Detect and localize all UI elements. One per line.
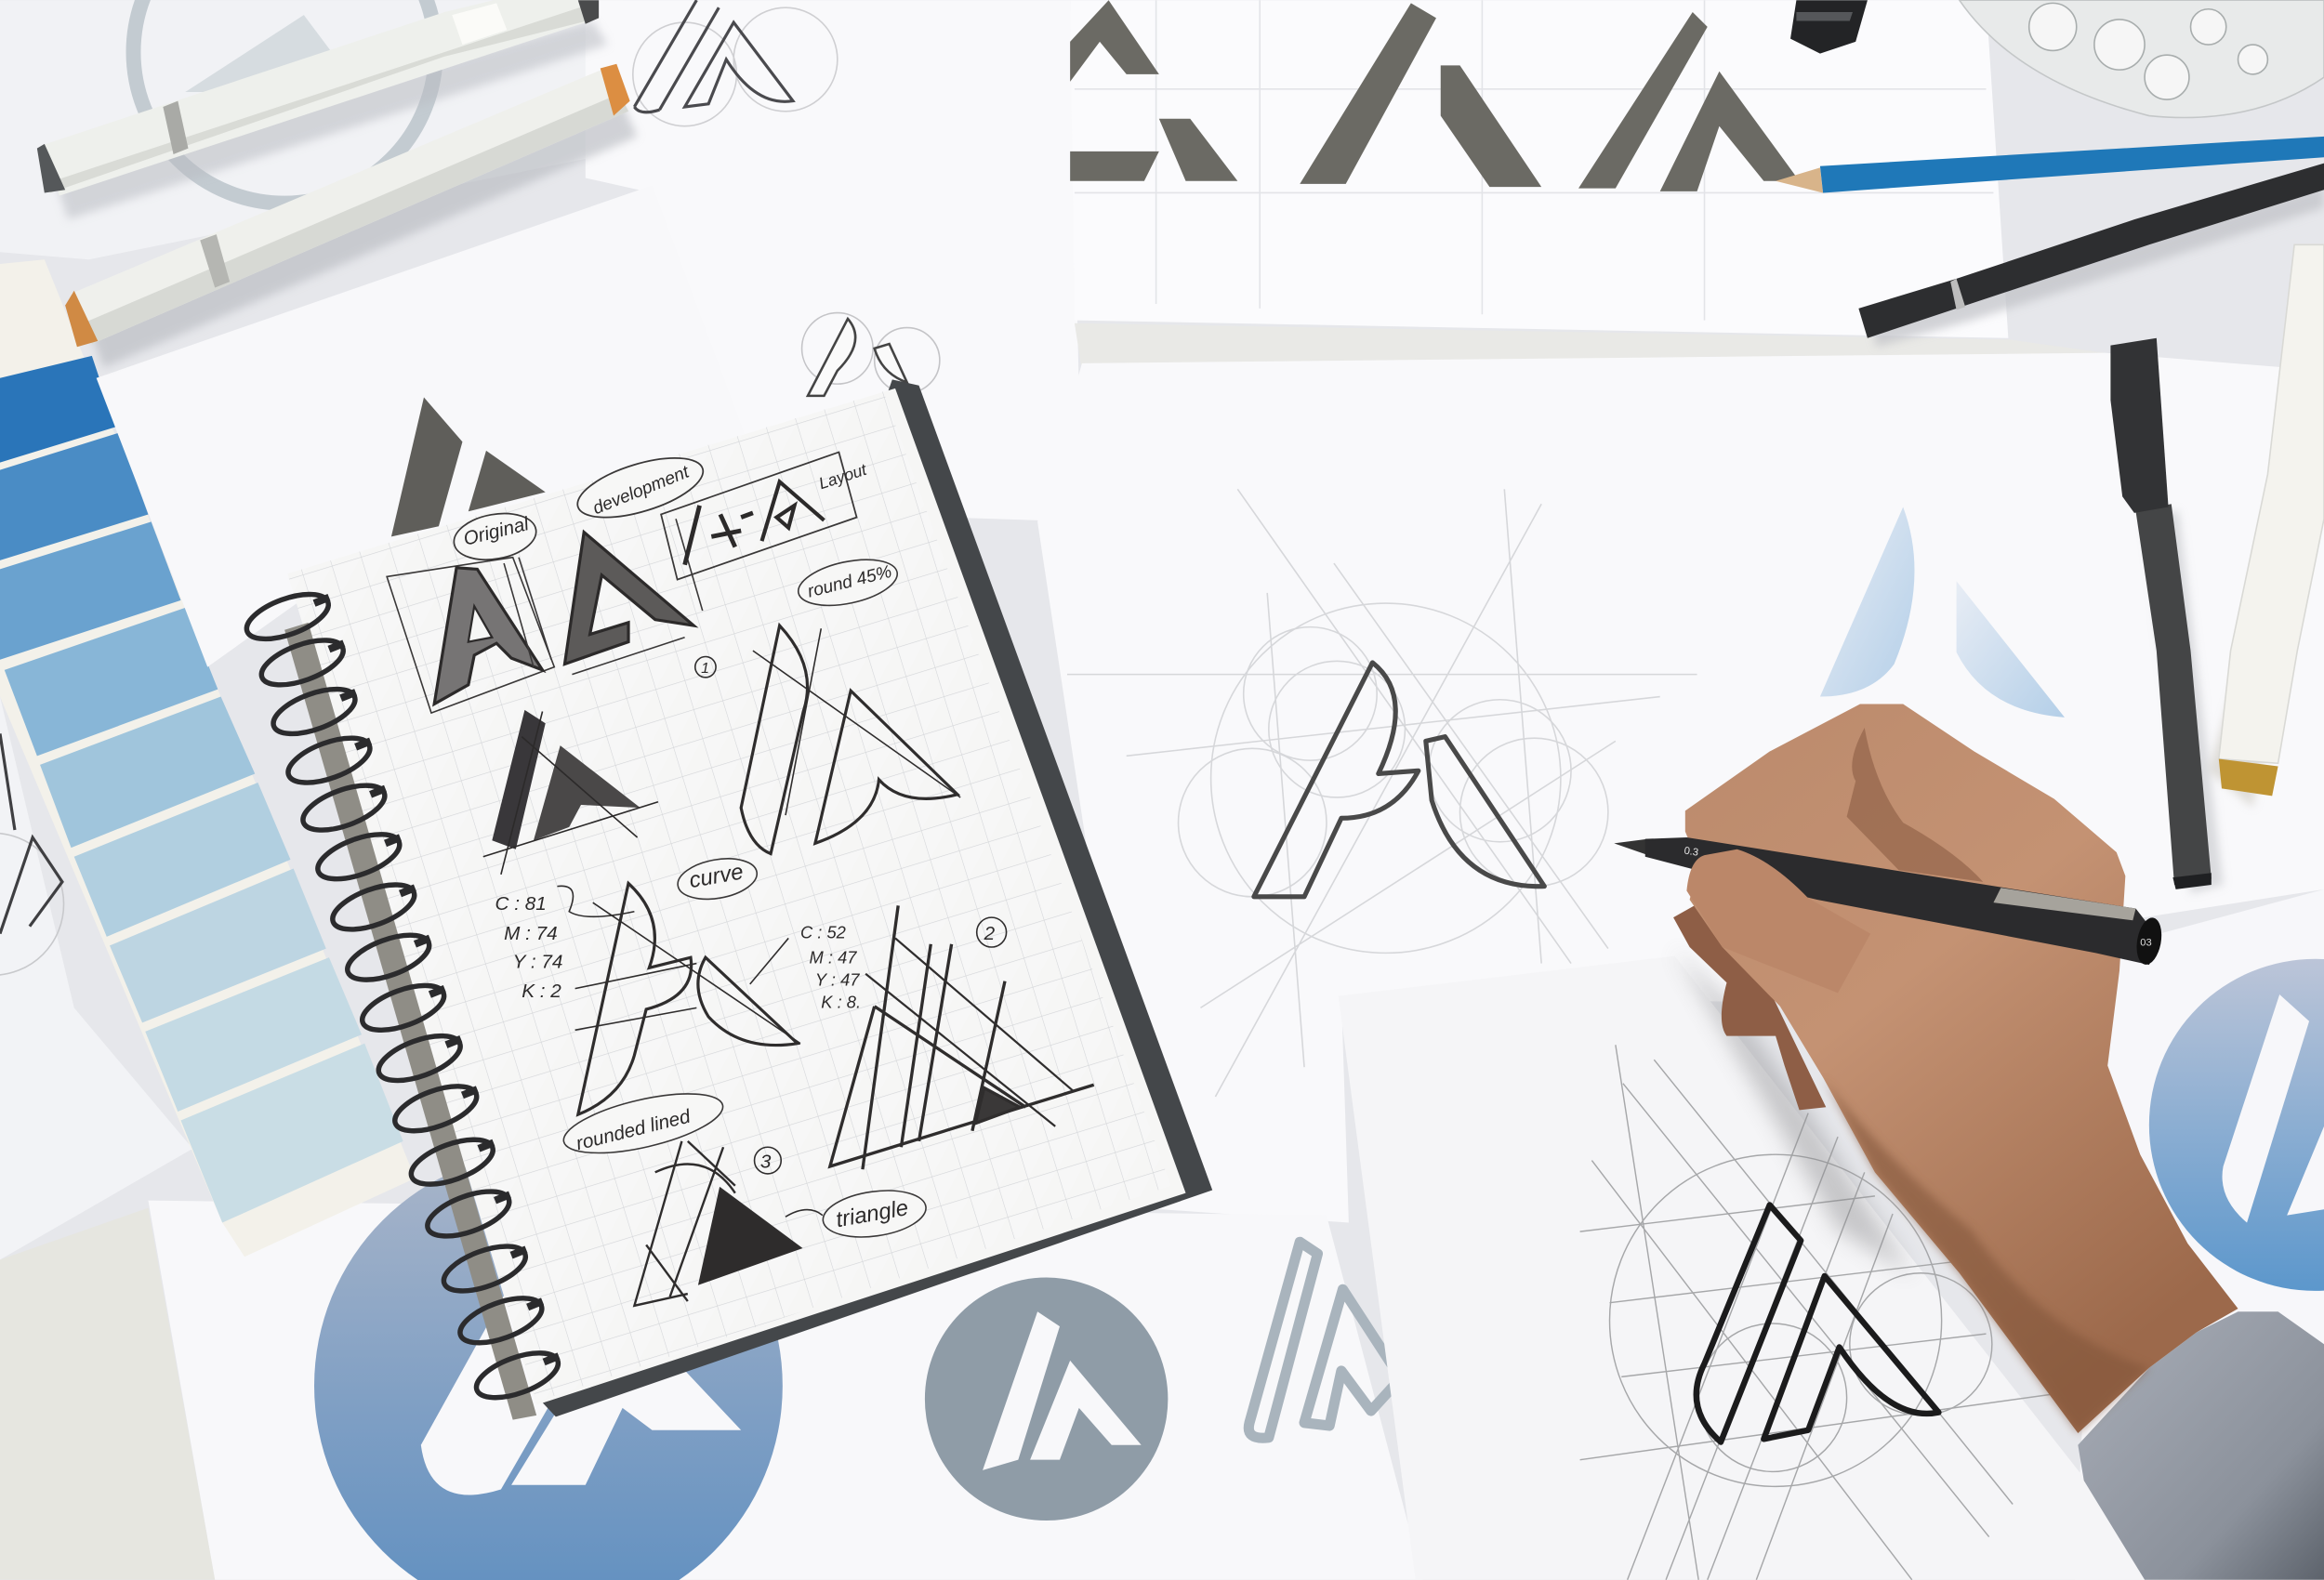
callout: rounded lined [559,1082,728,1165]
callout: curve: curve [687,859,746,893]
icon: technical pen in hand [1614,837,2165,993]
text: CMYK values right [800,922,861,1011]
icon: grey circle logo [925,1278,1168,1521]
panel: top-right sheet with dark logo variants [1070,0,2105,371]
notebook pages [287,388,1186,1405]
icon: marker pen upper [37,0,608,219]
text: CMYK values left: C : 81 [495,893,547,915]
callout: round 45%: round 45% [806,562,894,602]
text: CMYK values right: Y : 47 [815,969,860,989]
icon: number 3: 3 [760,1152,772,1173]
icon: number 2 [977,917,1007,947]
sketch: shaded logo [483,710,658,875]
icon: marker cap top [1790,0,1868,54]
icon: technical pen in hand: 0.3 [1684,846,1699,859]
icon: number 1 [695,657,716,678]
outline logo [1697,1205,1801,1442]
icon: black pen right [2110,338,2224,894]
panel: paper with dark triangle logo [97,185,748,667]
logo variant 3 [1578,12,1800,191]
text: CMYK values left: K : 2 [522,981,561,1002]
sketch: triangle with shaded mark [634,1141,800,1306]
notebook cover [534,379,1212,1416]
callout: development [571,446,709,530]
icon: blue pencil [1776,137,2324,192]
pale blue logo [1820,507,1914,697]
logo variant 2 [1300,3,1541,187]
index fold shadow [1847,728,1983,882]
text: CMYK values right: K : 8. [821,992,861,1011]
icon: technical pen in hand: 03 [2140,937,2152,948]
logo variant 1 [1070,0,1237,181]
text: CMYK values left: Y : 74 [513,951,562,972]
sketch: curved logo [741,625,960,854]
construction lines [1580,1045,2050,1580]
panel: left sheet behind swatches [0,697,192,1259]
logo outline [1254,663,1419,897]
callout: rounded lined: rounded lined [574,1105,693,1154]
callout: curve [675,853,760,905]
callout: Original [450,507,540,566]
icon: number 2: 2 [984,923,996,944]
wire spiral [241,586,563,1407]
panel: top centre sketch sheet [586,0,1082,521]
text: CMYK values left: M : 74 [504,923,558,944]
icon: protractor template [1960,0,2324,118]
callout: triangle: triangle [834,1195,910,1232]
curled lower fingers [1673,904,1826,1110]
icon: black pen top right [1858,164,2324,347]
sketch: layout box [661,452,870,580]
sleeve [2078,1311,2324,1580]
panel: bottom-right sheet with outline logo [1339,956,2164,1580]
sketch: triangle logo [830,905,1094,1169]
sketch: development A [564,519,703,675]
icon: hand holding pen [1673,704,2324,1580]
chart: colour swatch strip [0,259,415,1257]
icon: number 3 [755,1147,781,1174]
callout: round 45% [794,552,902,613]
icon: number 1: 1 [701,661,709,677]
icon: marker pen lower [65,64,638,368]
text: CMYK values right: M : 47 [810,948,857,968]
construction lines [1067,489,1697,1097]
sketch: layout box: Layout [816,460,870,493]
callout: Original: Original [461,513,532,550]
text: CMYK values left [495,893,562,1002]
icon: white marker right [2209,244,2324,808]
binding strip [284,623,536,1420]
panel: notebook [241,379,1212,1420]
sketch: original A [387,558,554,713]
panel: bottom-right corner paper with blue logo [2075,889,2324,1580]
callout: development: development [590,462,693,519]
text: CMYK values right: C : 52 [800,922,846,941]
hand shadow on paper [1675,949,1912,1274]
sketch: logo construction [557,883,800,1114]
thumb [1686,849,1870,993]
icon: outlined logo [1248,1242,1401,1438]
panel: bottom-centre paper with big blue circle [0,1152,1423,1580]
panel: top-left paper with circular logo [0,0,638,259]
panel: central sheet with construction drawing [1037,353,2324,1223]
callout: triangle [786,1185,929,1243]
palm and back of hand [1685,704,2238,1433]
forearm shadow [1823,1077,2149,1433]
